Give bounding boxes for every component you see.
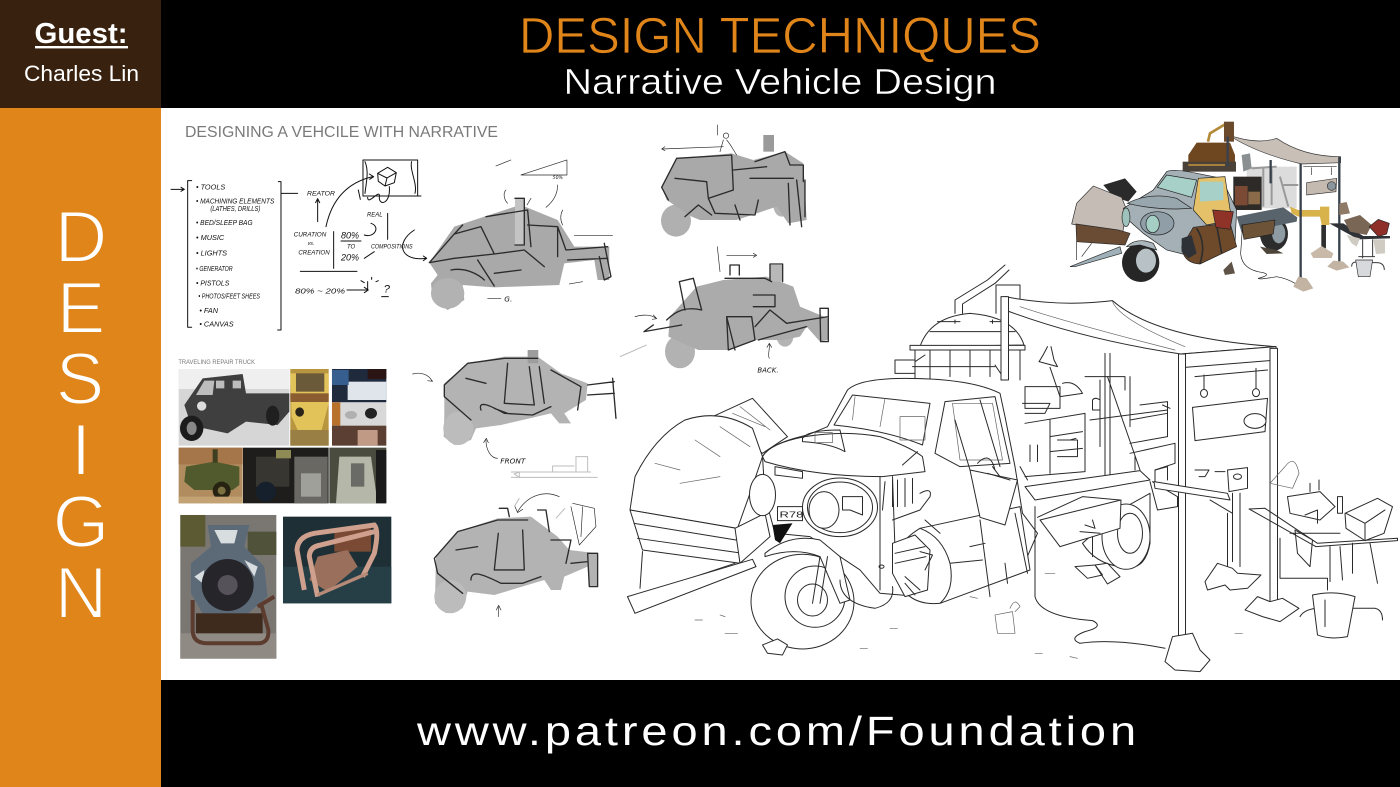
small ghost elevation drawing [511,457,598,477]
concept map labels [294,190,413,296]
tool bucket [955,400,1028,525]
barrel drum with engine [892,507,1030,604]
guest heading: Guest: [34,18,128,50]
sketch: front view labelled FRONT: FRONT [500,456,526,465]
concept map labels: 80% ~ 20% [295,286,345,295]
front wheel [1122,241,1159,282]
cable and small item [1241,225,1295,283]
photo: collage of vehicles [332,369,386,446]
workshop shelves and tools [1022,347,1175,477]
thumbnail sketch: top front view [429,160,613,310]
concept map strokes [300,160,421,293]
handwritten feature list: (LATHES, DRILLS) [210,204,260,213]
ground marks [695,573,1242,658]
concept map labels: CREATION [298,250,330,257]
panel: orange category sidebar [0,108,161,787]
concept map labels: 80% [341,231,359,241]
hanging sign [1303,167,1337,195]
photo: van interior [329,448,386,503]
tent canopy [1005,297,1278,367]
vertical word: DESIGN: D [55,197,107,278]
subtitle: Narrative Vehicle Design [564,61,996,102]
handwritten feature list: • GENERATOR [196,264,233,273]
title: DESIGN TECHNIQUES [519,7,1041,64]
concept map labels: REAL [367,213,383,219]
pole base rocks [1293,261,1349,292]
headlights and licence plate [750,474,878,537]
vertical word: DESIGN: S [56,339,104,420]
handwritten feature list: • MUSIC [196,233,225,242]
concept map labels: ? [384,284,391,296]
vertical word: DESIGN: N [55,553,107,634]
power cable [1035,507,1165,648]
handwritten feature list: • PHOTOS/FEET SHEES [198,291,260,300]
photo: dark workshop interior [243,448,329,503]
handwritten feature list [196,182,274,329]
thumbnail sketch: top front view: G. [504,295,512,304]
concept map labels: REATOR [307,190,335,197]
thumbnail sketch: top front view: 50% [553,175,563,181]
guest name: Charles Lin [24,61,139,86]
sketch: rear view labelled BACK: BACK. [757,367,779,375]
headlights and licence plate: R78 [780,510,803,520]
trailer with tarp [628,398,788,613]
flatbed, drawer and rear wheel [1237,207,1297,254]
concept map labels: COMPOSITIONS [371,244,413,251]
cab body [762,378,1038,597]
footer url: www.patreon.com/Foundation [416,708,1140,754]
tent poles [1228,137,1339,278]
tent canopy colour [1228,135,1341,164]
barrel drum [1182,223,1237,264]
handwritten feature list: • MACHINING ELEMENTS [196,196,274,205]
photo: rusty engine [180,515,276,659]
thumbnail sketches: middle and lower front views [413,350,616,617]
lathe on stand [1154,467,1261,590]
lathe [1290,207,1333,258]
reference photo board [178,359,391,659]
sketch: front view labelled FRONT [413,350,616,465]
vertical word: DESIGN [53,197,109,634]
photo: pink pipe frame generator [283,517,391,603]
thumbnail sketches: top right two vehicle views [620,125,828,375]
colour rendering of finished truck [1070,122,1390,292]
list bracket with arrow [171,181,298,330]
dice icon [378,167,396,186]
concept map labels: vs. [308,241,314,247]
cargo bed, drawer, rear wheel [1025,471,1178,584]
concept map labels: 20% [340,253,359,263]
panel: artwork sheet [161,108,1400,680]
photo: yellow cab [290,369,329,446]
work table with tools [1249,461,1398,638]
concept map labels: CURATION [294,232,326,239]
chimney and barrel [895,265,1025,380]
front wheel and fender [751,523,893,655]
hanging sign with gear [1192,368,1268,441]
panel: guest box [0,0,161,108]
vertical word: DESIGN: E [57,268,105,349]
tent poles [1001,297,1278,646]
sketch: lower view with arrow [434,494,598,617]
equipment behind cab [1233,153,1298,210]
handwritten feature list: • PISTOLS [196,279,229,288]
board title: TRAVELING REPAIR TRUCK [178,359,256,366]
vertical word: DESIGN: G [53,482,109,563]
bucket [1213,210,1233,229]
pole base rocks [1165,597,1299,672]
vertical word: DESIGN: I [71,410,91,491]
handwritten feature list: • CANVAS [199,320,234,329]
small water jug [995,602,1020,633]
concept map labels: TO [347,245,356,251]
handwritten feature list: • FAN [199,306,219,315]
truck cab body [1122,170,1237,258]
curved arrow to sketch [403,230,427,261]
handwritten feature list: • LIGHTS [196,249,227,258]
photo: black and white three wheeler [179,369,289,446]
handwritten feature list: • TOOLS [196,182,225,191]
trailer tarp and box [1070,178,1137,267]
sketch: rear view labelled BACK [620,247,828,375]
boiler and chimney [1183,122,1236,172]
photo: green generator trailer [179,448,243,503]
handwritten notes diagram [171,160,427,330]
sheet heading: DESIGNING A VEHCILE WITH NARRATIVE [185,124,498,141]
large line drawing of truck [628,265,1398,672]
sketch: three quarter front [661,125,807,237]
handwritten feature list: • BED/SLEEP BAG [196,218,253,227]
side table with tools [1329,202,1390,277]
